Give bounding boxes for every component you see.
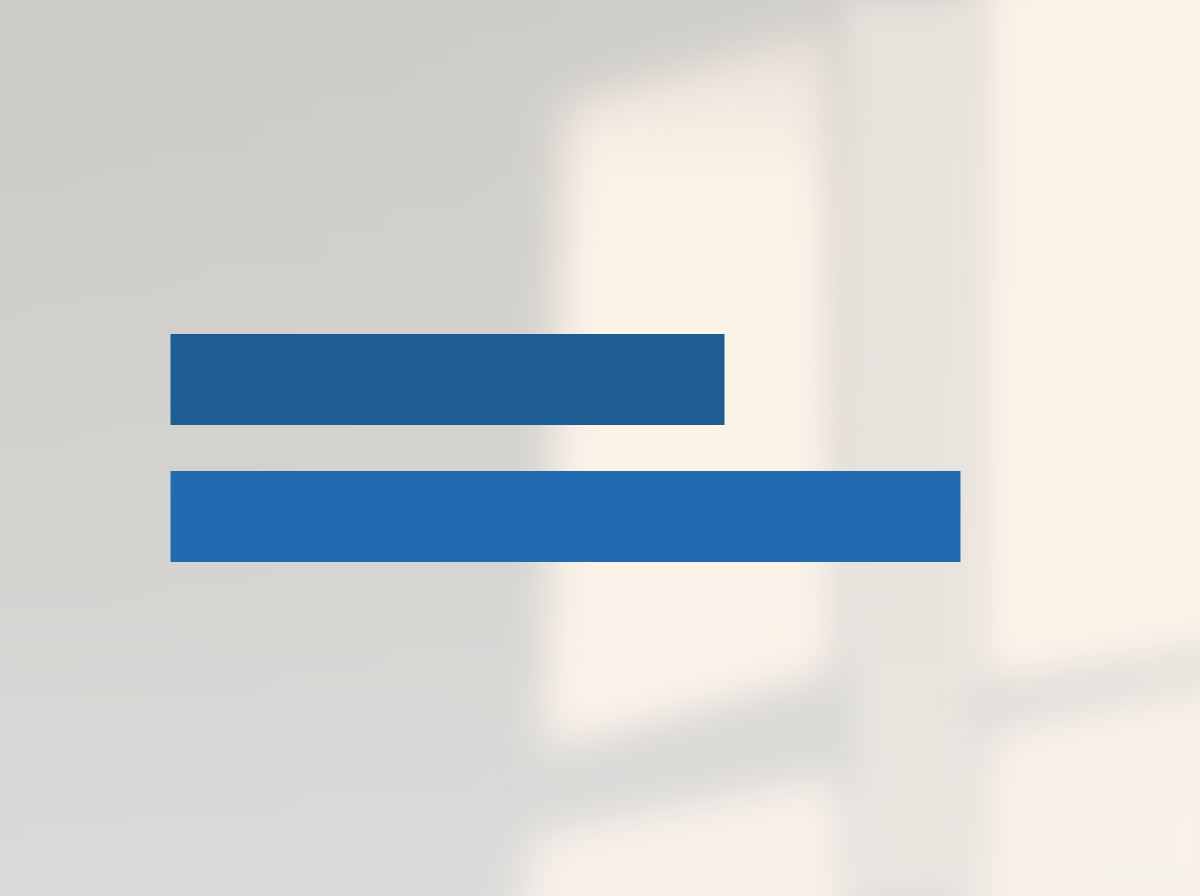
bar: bottom, lighter blue (170, 471, 960, 562)
bar: top, darker blue (170, 334, 724, 425)
